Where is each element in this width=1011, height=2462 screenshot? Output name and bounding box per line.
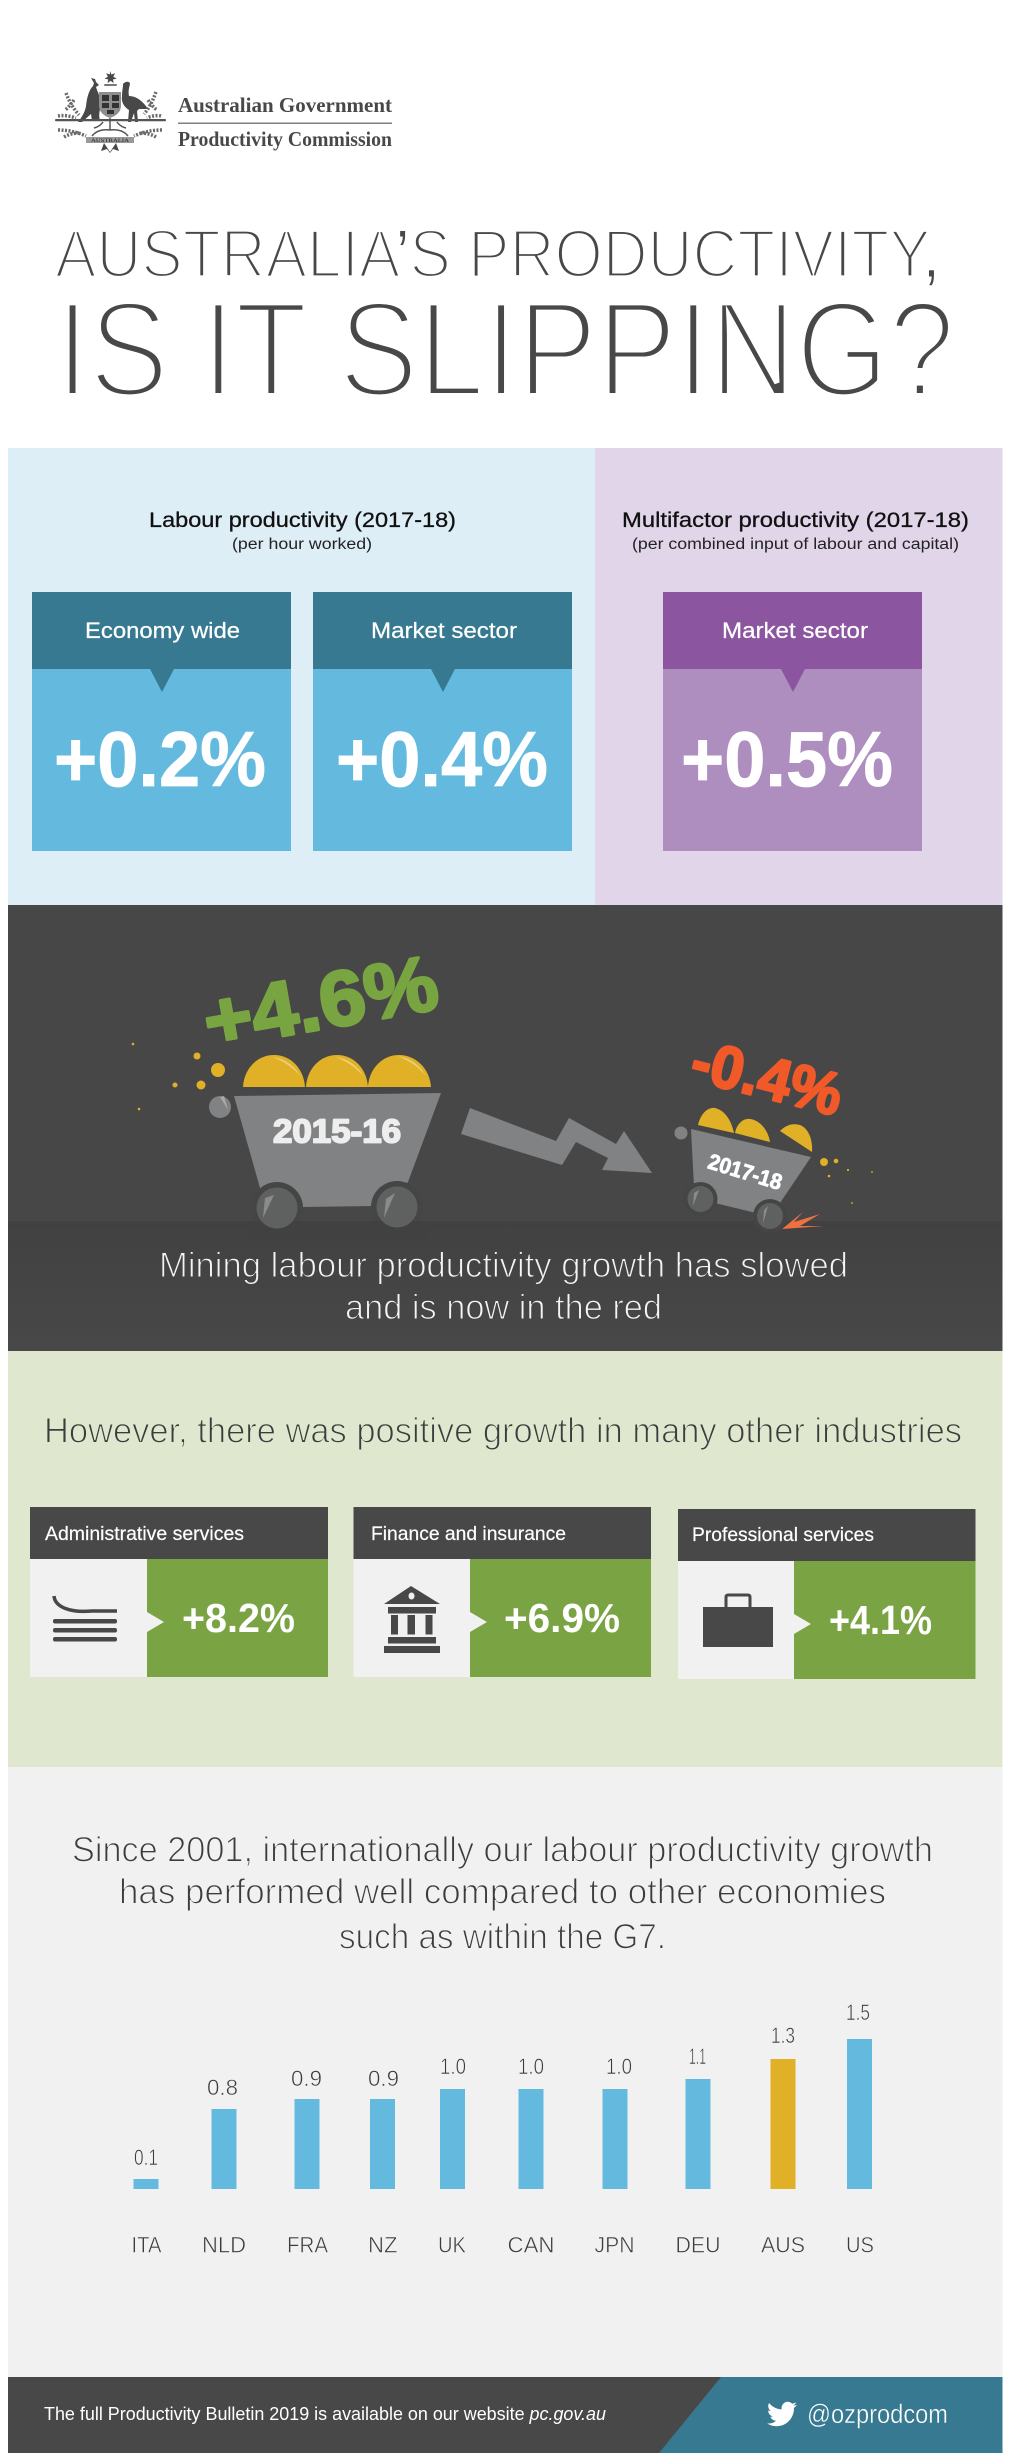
card: market sector bbox=[313, 592, 572, 851]
title bbox=[55, 216, 955, 425]
panel: labour productivity bbox=[8, 448, 595, 905]
category labels: CAN bbox=[508, 2232, 554, 2258]
sparkles: left coins bbox=[132, 1043, 225, 1110]
value labels: 1.0 bbox=[440, 2054, 466, 2079]
card: finance and insurance: Finance and insurance bbox=[371, 1523, 566, 1545]
value labels: 1.0 bbox=[606, 2054, 632, 2079]
icon: coat of arms: AUSTRALIA bbox=[91, 138, 129, 144]
icon: twitter bird bbox=[767, 2402, 797, 2426]
heading: G7 comparison: Since 2001, internationally our labour productivity growth bbox=[72, 1830, 933, 1870]
value labels: 1.5 bbox=[846, 2000, 870, 2025]
number: +4.6%: +4.6% bbox=[197, 938, 444, 1066]
card: economy wide: Economy wide bbox=[85, 618, 240, 643]
subheading: per combined input: (per combined input of labour and capital) bbox=[632, 536, 959, 553]
category labels: NLD bbox=[202, 2232, 246, 2258]
panel: multifactor productivity bbox=[595, 448, 1002, 905]
sparkles: right coins bbox=[820, 1158, 873, 1204]
card: finance and insurance: +6.9% bbox=[504, 1595, 620, 1641]
label: 2015-16: 2015-16 bbox=[273, 1112, 401, 1150]
arrow: falling bbox=[461, 1108, 652, 1173]
panel: international comparison bbox=[8, 1767, 1002, 2377]
value labels: 1.3 bbox=[771, 2023, 795, 2048]
category labels: AUS bbox=[761, 2232, 805, 2258]
logo: Australian Government Productivity Commission bbox=[55, 71, 392, 153]
card: finance and insurance bbox=[354, 1507, 651, 1677]
category labels: FRA bbox=[287, 2232, 328, 2258]
category labels: NZ bbox=[368, 2232, 398, 2258]
card: administrative services: +8.2% bbox=[182, 1595, 295, 1641]
category labels: ITA bbox=[132, 2232, 162, 2258]
card: economy wide bbox=[32, 592, 291, 851]
value labels: 0.9 bbox=[291, 2066, 322, 2091]
logo text: Productivity Commission: Productivity Commission bbox=[178, 127, 392, 151]
value labels: 0.9 bbox=[368, 2066, 399, 2091]
text: mining statement: and is now in the red bbox=[345, 1288, 662, 1327]
card: administrative services: Administrative services bbox=[45, 1523, 244, 1545]
panel: industries bbox=[8, 1351, 1002, 1767]
logo text: Australian Government: Australian Government bbox=[178, 93, 392, 117]
bar chart bbox=[132, 2000, 874, 2258]
category labels: US bbox=[846, 2232, 874, 2258]
value labels: 0.8 bbox=[207, 2075, 238, 2100]
footer text: The full Productivity Bulletin 2019 is available on our website pc.gov.au bbox=[44, 2403, 606, 2424]
heading: G7 comparison: such as within the G7. bbox=[339, 1918, 666, 1956]
heading: positive growth: However, there was positive growth in many other industries bbox=[44, 1412, 962, 1450]
heading: G7 comparison: has performed well compared to other economies bbox=[119, 1872, 886, 1912]
footer bbox=[8, 2377, 1002, 2453]
heading: G7 comparison bbox=[72, 1830, 933, 1956]
subheading: per hour worked: (per hour worked) bbox=[232, 536, 372, 553]
card: market sector: +0.4% bbox=[336, 715, 548, 803]
value labels: 1.0 bbox=[518, 2054, 544, 2079]
card: multifactor market sector: +0.5% bbox=[681, 715, 893, 803]
icon: bank bbox=[384, 1586, 440, 1653]
card: market sector: Market sector bbox=[371, 618, 517, 643]
text: mining statement: Mining labour productivity growth has slowed bbox=[159, 1246, 848, 1285]
panel: mining bbox=[8, 905, 1002, 1351]
bars bbox=[134, 2039, 872, 2189]
icon: small mine cart bbox=[674, 1108, 812, 1233]
value labels: 0.1 bbox=[134, 2145, 158, 2170]
category labels: DEU bbox=[676, 2232, 720, 2258]
card: economy wide: +0.2% bbox=[54, 715, 266, 803]
icon: large mine cart bbox=[209, 1055, 441, 1241]
heading: multifactor productivity: Multifactor productivity (2017-18) bbox=[622, 509, 969, 532]
card: multifactor market sector: Market sector bbox=[722, 618, 868, 643]
card: professional services: Professional services bbox=[692, 1524, 874, 1546]
value labels bbox=[134, 2000, 870, 2170]
icon: sparks bbox=[782, 1212, 824, 1229]
value labels: 1.1 bbox=[689, 2044, 706, 2069]
category labels: JPN bbox=[594, 2232, 634, 2258]
heading: labour productivity: Labour productivity (2017-18) bbox=[149, 509, 456, 532]
card: professional services: +4.1% bbox=[829, 1597, 932, 1643]
icon: briefcase bbox=[703, 1595, 773, 1647]
icon: coat of arms bbox=[55, 71, 166, 153]
card: multifactor market sector bbox=[663, 592, 922, 851]
title: AUSTRALIA’S PRODUCTIVITY, bbox=[55, 216, 940, 292]
category labels: UK bbox=[438, 2232, 466, 2258]
category labels bbox=[132, 2232, 874, 2258]
label: 2017-18: 2017-18 bbox=[705, 1149, 785, 1195]
number: -0.4%: -0.4% bbox=[685, 1027, 850, 1129]
icon: documents bbox=[53, 1596, 117, 1642]
twitter handle: @ozprodcom bbox=[807, 2399, 948, 2429]
card: professional services bbox=[678, 1509, 976, 1679]
text: mining statement bbox=[159, 1246, 848, 1327]
card: administrative services bbox=[30, 1507, 328, 1677]
